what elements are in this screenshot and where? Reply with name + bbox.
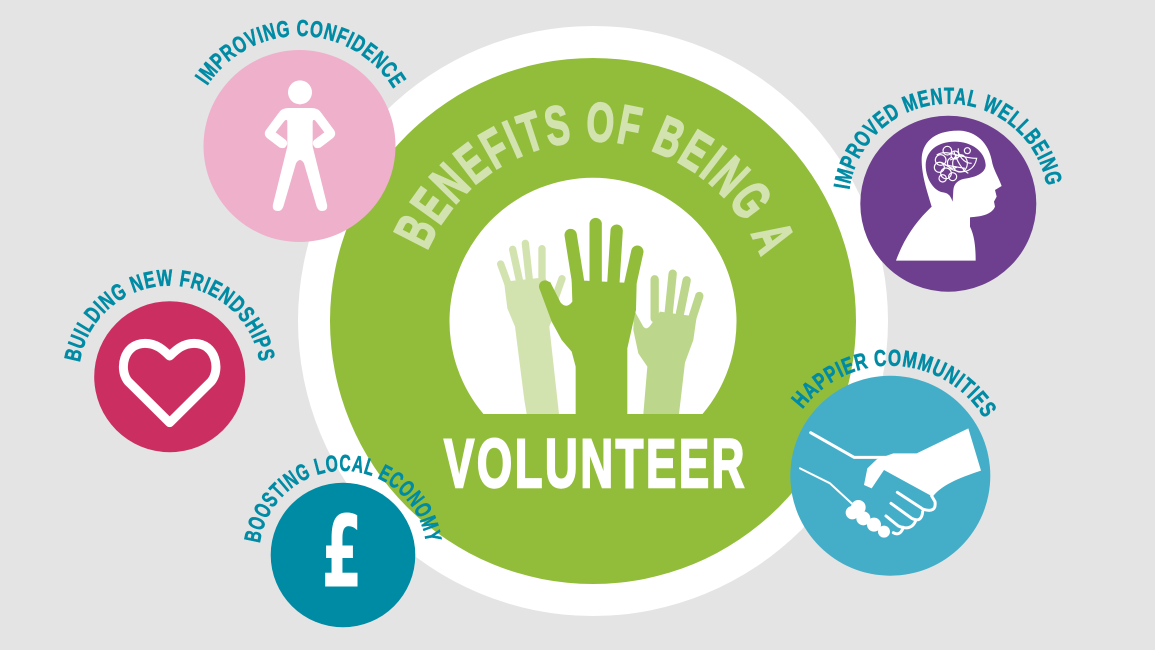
blue circle	[790, 376, 990, 576]
label: building new friendships: BUILDING NEW FRIENDSHIPS	[64, 269, 275, 362]
label: boosting local economy: BOOSTING LOCAL ECONOMY	[244, 454, 442, 543]
icon: raised hands	[501, 224, 699, 414]
panel: boosting local economy	[244, 454, 442, 628]
panel: happier communities	[790, 349, 996, 576]
icon: handshake	[800, 428, 981, 538]
white arch behind hands	[450, 178, 736, 414]
panel: improving confidence	[194, 20, 407, 242]
heading: volunteer: VOLUNTEER	[444, 425, 747, 502]
panel: central badge	[298, 26, 888, 616]
pink circle	[204, 50, 396, 242]
icon: head with tangled brain	[896, 131, 1002, 261]
label: improved mental wellbeing: IMPROVED MENTAL WELLBEING	[834, 88, 1062, 189]
purple circle	[860, 116, 1036, 292]
icon: heart	[123, 343, 216, 423]
icon: standing person	[265, 80, 335, 211]
white outer ring	[298, 26, 888, 616]
icon: pound sign: £	[322, 496, 362, 610]
green disc	[330, 58, 856, 584]
label: improving confidence: IMPROVING CONFIDENCE	[194, 20, 407, 89]
centre hand	[539, 224, 637, 414]
title: benefits of being a: BENEFITS OF BEING A	[393, 102, 793, 258]
teal circle	[271, 483, 415, 627]
crimson circle	[94, 301, 245, 452]
panel: building new friendships	[64, 269, 275, 452]
right hand	[633, 274, 699, 414]
label: happier communities: HAPPIER COMMUNITIES	[790, 349, 996, 416]
left hand	[501, 243, 562, 414]
panel: improved mental wellbeing	[834, 88, 1062, 292]
